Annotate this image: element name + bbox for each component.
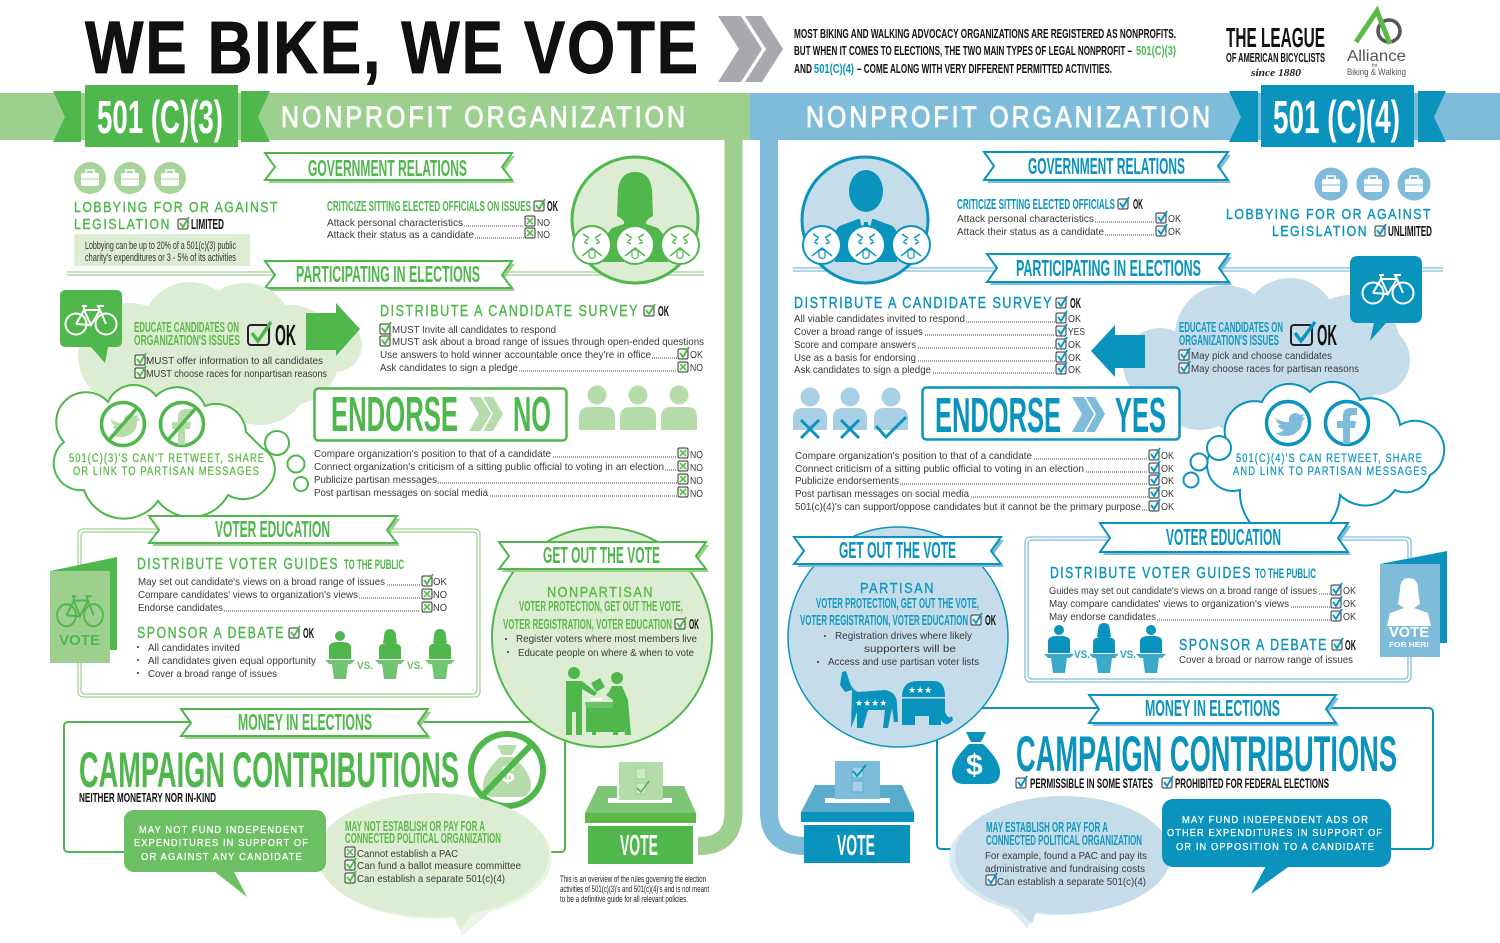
text: lobbying: LOBBYING FOR OR AGAINST xyxy=(1226,206,1432,223)
callout: may not fund: MAY NOT FUND INDEPENDENT xyxy=(139,824,305,836)
note: lobbying limit: charity's expenditures or 3 - 5% of its activities xyxy=(85,252,236,264)
endorse: yes: ENDORSE xyxy=(935,389,1061,443)
text: nonpartisan xyxy=(503,585,699,659)
text: distribute a candidate survey: OK xyxy=(1070,295,1081,312)
speech bubble: connected political organization: MAY ESTABLISH OR PAY FOR A xyxy=(986,820,1108,836)
text: educate candidates: EDUCATE CANDIDATES ON xyxy=(134,320,239,336)
text: distribute voter guides: OK xyxy=(1343,598,1356,610)
illustration: man and angry faces xyxy=(802,157,930,283)
illustration: woman and angry faces xyxy=(572,157,699,283)
text: criticize officials: NO xyxy=(537,229,550,241)
endorse: no: NO xyxy=(513,388,551,442)
text: criticize officials: Attack personal characteristics xyxy=(957,213,1094,225)
icon: debate podiums: VS. xyxy=(1074,649,1090,661)
disclaimer text: to be a definitive guide for all relevant policies. xyxy=(560,894,688,905)
thought cloud: cannot retweet: 501(C)(3)'S CAN'T RETWEET, SHARE xyxy=(69,453,265,465)
text: distribute a candidate survey: MUST Invite all candidates to respond xyxy=(392,324,556,336)
logo: Alliance for Biking and Walking: Biking & Walking xyxy=(1347,67,1406,77)
banner: money in elections xyxy=(1089,695,1339,726)
panel: government relations right xyxy=(957,152,1432,240)
icon: ballot box left: VOTE xyxy=(620,830,658,862)
panel: money in elections left xyxy=(64,709,565,936)
icon: grey chevrons xyxy=(718,16,783,82)
icon: elephant: ★★★ xyxy=(908,685,932,695)
text: nonpartisan: Register voters where most members live xyxy=(516,633,697,645)
text: educate candidates xyxy=(1179,320,1359,375)
callout: may not fund: OR AGAINST ANY CANDIDATE xyxy=(141,851,303,863)
text: distribute a candidate survey: NO xyxy=(690,362,703,374)
text: sponsor a debate: SPONSOR A DEBATE xyxy=(1179,637,1328,654)
heading: nonprofit organization left: NONPROFIT ORGANIZATION xyxy=(281,101,688,134)
disclaimer text: This is an overview of the rules governing the election xyxy=(560,874,706,885)
icons: briefcases xyxy=(74,162,186,194)
text: distribute a candidate survey: Ask candidates to sign a pledge xyxy=(380,362,518,374)
text: distribute a candidate survey: Use answers to hold winner accountable once they're in office xyxy=(380,349,651,361)
text: educate candidates: May choose races for partisan reasons xyxy=(1191,363,1359,375)
thought cloud: cannot retweet: OR LINK TO PARTISAN MESSAGES xyxy=(73,466,260,478)
list: endorse no rules: Publicize partisan messages xyxy=(314,474,437,486)
icon: elephant xyxy=(902,681,953,725)
text: distribute voter guides: OK xyxy=(1343,585,1356,597)
callout: may not fund: EXPENDITURES IN SUPPORT OF xyxy=(134,837,309,849)
icon: vote for her folder xyxy=(1380,551,1447,657)
text: lobbying xyxy=(1226,206,1432,240)
icons: people with crosses and check xyxy=(793,388,908,438)
list: endorse no rules: Post partisan messages on social media xyxy=(314,487,488,499)
icon: bicycle speech bubble xyxy=(60,290,122,363)
text: educate candidates xyxy=(134,320,327,380)
text: sponsor a debate xyxy=(1179,637,1356,666)
text: distribute a candidate survey: OK xyxy=(658,303,669,320)
text: distribute a candidate survey: MUST ask about a broad range of issues through open-ended questions xyxy=(392,336,704,348)
text: criticize officials: CRITICIZE SITTING ELECTED OFFICIALS xyxy=(957,196,1115,213)
speech bubble: connected political organization: For example, found a PAC and pay its xyxy=(985,850,1147,862)
text: educate candidates: ORGANIZATION'S ISSUES xyxy=(134,333,240,349)
text: criticize officials xyxy=(327,198,558,241)
text: distribute voter guides: TO THE PUBLIC xyxy=(344,556,404,572)
text: distribute a candidate survey: DISTRIBUTE A CANDIDATE SURVEY xyxy=(380,303,639,320)
list: endorse yes rules: Connect criticism of a sitting public official to voting in an election xyxy=(795,463,1084,475)
speech bubble: connected political organization: administrative and fundraising costs xyxy=(985,863,1145,875)
banner: government relations: GOVERNMENT RELATIONS xyxy=(308,155,467,181)
thought cloud: cannot retweet xyxy=(54,385,308,519)
text: distribute a candidate survey: Use as a basis for endorsing xyxy=(794,352,916,364)
intro text: 501(C)(3) xyxy=(1136,43,1176,58)
text: distribute voter guides: TO THE PUBLIC xyxy=(1255,565,1316,581)
text: partisan: VOTER REGISTRATION, VOTER EDUCATION xyxy=(800,612,968,629)
text: sponsor a debate: All candidates given equal opportunity xyxy=(148,655,317,667)
note: lobbying limit xyxy=(74,234,250,266)
callout: may fund: OR IN OPPOSITION TO A CANDIDATE xyxy=(1176,841,1375,853)
text: lobbying: UNLIMITED xyxy=(1388,223,1432,240)
ribbon: 501(c)(4) xyxy=(1229,85,1446,147)
panel: money in elections right xyxy=(937,695,1433,929)
text: criticize officials: OK xyxy=(1168,226,1181,238)
speech bubble: connected political organization: CONNECTED POLITICAL ORGANIZATION xyxy=(345,831,501,847)
callout: may fund: MAY FUND INDEPENDENT ADS OR xyxy=(1182,814,1369,826)
list: endorse yes rules: OK xyxy=(1161,450,1174,462)
text: distribute a candidate survey: Cover a broad range of issues xyxy=(794,326,923,338)
banner: get out the vote: GET OUT THE VOTE xyxy=(543,542,660,568)
text: criticize officials: OK xyxy=(1168,213,1181,225)
text: lobbying: LOBBYING FOR OR AGAINST xyxy=(74,199,279,216)
list: endorse no rules: NO xyxy=(690,462,703,474)
list: endorse yes rules: OK xyxy=(1161,501,1174,513)
left header bar and connector xyxy=(0,93,750,846)
text: nonpartisan: VOTER REGISTRATION, VOTER EDUCATION xyxy=(503,616,672,633)
banner: money in elections: MONEY IN ELECTIONS xyxy=(1145,695,1280,721)
speech bubble: connected political organization: Can establish a separate 501(c)(4) xyxy=(357,873,505,885)
ribbon: 501(c)(3): 501 (C)(3) xyxy=(97,91,223,143)
text: distribute voter guides: Guides may set out candidate's views on a broad range of issues xyxy=(1049,585,1317,597)
subheading: neither monetary nor in-kind: NEITHER MONETARY NOR IN-KIND xyxy=(79,790,216,805)
text: criticize officials: Attack their status as a candidate xyxy=(957,226,1104,238)
title: WE BIKE, WE VOTE xyxy=(85,6,700,89)
thought cloud: can retweet xyxy=(1184,382,1444,543)
text: partisan: supporters will be xyxy=(864,643,956,655)
panel: get out the vote left: OK xyxy=(689,616,699,633)
text: distribute a candidate survey: OK xyxy=(1068,364,1081,376)
text: distribute voter guides: DISTRIBUTE VOTER GUIDES xyxy=(1050,565,1252,582)
text: distribute a candidate survey: OK xyxy=(1068,352,1081,364)
list: endorse no rules: NO xyxy=(690,488,703,500)
intro text xyxy=(794,26,1176,76)
cloud: educate candidates xyxy=(78,282,362,430)
banner: participating in elections xyxy=(265,261,515,291)
icon: vote for her folder: FOR HER! xyxy=(1389,640,1429,649)
icons: three people xyxy=(579,386,697,430)
text: educate candidates: OK xyxy=(1317,320,1337,352)
text: OK xyxy=(547,198,558,215)
list: endorse yes rules: Compare organization's position to that of a candidate xyxy=(795,450,1032,462)
banner: voter education xyxy=(1100,523,1351,555)
list: endorse yes rules: OK xyxy=(1161,488,1174,500)
banner: voter education: VOTER EDUCATION xyxy=(1166,524,1281,550)
intro text: BUT WHEN IT COMES TO ELECTIONS, THE TWO MAIN TYPES OF LEGAL NONPROFIT – xyxy=(794,43,1132,58)
text: distribute a candidate survey: OK xyxy=(1068,339,1081,351)
disclaimer text xyxy=(560,874,709,905)
icon: crossed-out money bag xyxy=(471,734,543,806)
text: distribute a candidate survey xyxy=(794,295,1085,376)
text: sponsor a debate: Cover a broad range of issues xyxy=(148,668,277,680)
panel: get out the vote right: OK xyxy=(985,612,996,629)
text: nonpartisan: VOTER PROTECTION, GET OUT THE VOTE, xyxy=(519,598,683,615)
text: distribute voter guides: May compare candidates' views to organization's views xyxy=(1049,598,1289,610)
text: nonpartisan: NONPARTISAN xyxy=(547,585,654,601)
panel: voter education left xyxy=(50,516,480,697)
list: endorse no rules: NO xyxy=(690,475,703,487)
icon: donkey xyxy=(840,671,898,728)
text: sponsor a debate: OK xyxy=(303,625,314,642)
list: endorse yes rules: OK xyxy=(1161,475,1174,487)
text: distribute voter guides xyxy=(137,556,447,614)
panel: government relations left xyxy=(74,153,558,266)
banner: government relations xyxy=(265,153,515,183)
speech bubble: connected political organization xyxy=(949,796,1171,929)
panel: get out the vote left xyxy=(492,527,712,747)
intro text: – COME ALONG WITH VERY DIFFERENT PERMITTED ACTIVITIES. xyxy=(857,61,1112,76)
cloud: educate candidates xyxy=(1123,278,1410,435)
text: educate candidates: OK xyxy=(275,320,296,352)
banner: voter education xyxy=(149,516,400,546)
text: sponsor a debate: SPONSOR A DEBATE xyxy=(137,625,285,642)
speech bubble: connected political organization: Can establish a separate 501(c)(4) xyxy=(997,876,1146,888)
text: educate candidates: May pick and choose candidates xyxy=(1191,350,1332,362)
banner: government relations xyxy=(984,152,1231,183)
speech bubble: connected political organization xyxy=(317,793,552,936)
logo: League of American Bicyclists: OF AMERICAN BICYCLISTS xyxy=(1226,50,1325,65)
icon: voter guide folder: VOTE xyxy=(59,632,100,649)
icon: ballot box left xyxy=(585,762,696,864)
text: criticize officials: Attack personal characteristics xyxy=(327,217,463,229)
text: sponsor a debate xyxy=(137,625,317,680)
thought cloud: can retweet: 501(C)(4)'S CAN RETWEET, SHARE xyxy=(1236,453,1423,465)
speech bubble: connected political organization: MAY NOT ESTABLISH OR PAY FOR A xyxy=(345,819,485,835)
text: distribute voter guides: OK xyxy=(433,576,447,588)
intro text: 501(C)(4) xyxy=(814,61,854,76)
text: educate candidates: EDUCATE CANDIDATES ON xyxy=(1179,320,1283,336)
icon: ballot box right: VOTE xyxy=(837,830,875,862)
list: endorse no rules: NO xyxy=(690,449,703,461)
banner: money in elections xyxy=(181,709,431,739)
panel: voter education right xyxy=(1025,523,1447,682)
panel: participating in elections left xyxy=(54,157,704,519)
text: distribute voter guides xyxy=(1049,565,1356,623)
ribbon: 501(c)(3) xyxy=(53,85,270,147)
icon: crossed-out money bag: $ xyxy=(501,761,515,788)
banner: money in elections: MONEY IN ELECTIONS xyxy=(238,709,372,735)
icon: debate podiums xyxy=(1044,623,1166,673)
logo: League of American Bicyclists: since 1880 xyxy=(1250,68,1301,79)
text: criticize officials: CRITICIZE SITTING ELECTED OFFICIALS ON ISSUES xyxy=(327,198,531,215)
list: endorse no rules: Compare organization's position to that of a candidate xyxy=(314,448,551,460)
right header bar and connector xyxy=(750,93,1500,846)
intro text: MOST BIKING AND WALKING ADVOCACY ORGANIZATIONS ARE REGISTERED AS NONPROFITS. xyxy=(794,26,1176,41)
text: nonpartisan: Educate people on where & when to vote xyxy=(518,647,694,659)
list: endorse yes rules: Post partisan messages on social media xyxy=(795,488,969,500)
text: educate candidates: MUST choose races for nonpartisan reasons xyxy=(146,368,327,380)
ribbon: 501(c)(4): 501 (C)(4) xyxy=(1273,91,1400,143)
list: endorse no rules: Connect organization's criticism of a sitting public official to voting in an election xyxy=(314,461,664,473)
text: lobbying: LIMITED xyxy=(191,216,224,233)
text: distribute a candidate survey: All viable candidates invited to respond xyxy=(794,313,965,325)
logo: Alliance for Biking and Walking xyxy=(1347,11,1406,77)
list: endorse yes rules: OK xyxy=(1161,463,1174,475)
text: distribute voter guides: DISTRIBUTE VOTER GUIDES xyxy=(137,556,339,573)
text: distribute a candidate survey xyxy=(380,303,704,374)
text: distribute voter guides: NO xyxy=(433,602,447,614)
icon: money bag: $ xyxy=(966,749,983,782)
text: criticize officials: Attack their status as a candidate xyxy=(327,229,474,241)
icon: voters at ballot box xyxy=(566,667,631,735)
icon: money bag xyxy=(952,732,1000,784)
text: criticize officials: NO xyxy=(537,217,550,229)
logo: League of American Bicyclists xyxy=(1226,22,1325,79)
subheading: state and federal rules: PROHIBITED FOR FEDERAL ELECTIONS xyxy=(1175,775,1329,791)
list: endorse yes rules: 501(c)(4)'s can support/oppose candidates but it cannot be the primary purpose xyxy=(795,501,1141,513)
speech bubble: connected political organization: CONNECTED POLITICAL ORGANIZATION xyxy=(986,833,1142,849)
logo: League of American Bicyclists: THE LEAGUE xyxy=(1226,22,1325,53)
banner: get out the vote xyxy=(794,537,1004,567)
endorse: yes: YES xyxy=(1115,389,1166,443)
icon: ballot box right xyxy=(801,761,914,863)
icon: bicycle speech bubble xyxy=(1350,256,1422,341)
banner: participating in elections: PARTICIPATING IN ELECTIONS xyxy=(296,261,480,287)
banner: participating in elections: PARTICIPATING IN ELECTIONS xyxy=(1016,255,1201,281)
list: endorse no rules xyxy=(314,448,703,500)
intro text: AND xyxy=(794,61,812,76)
text: distribute voter guides: Endorse candidates xyxy=(138,602,223,614)
text: lobbying: LEGISLATION xyxy=(74,216,171,233)
text: distribute a candidate survey: YES xyxy=(1068,326,1085,338)
panel: get out the vote right xyxy=(788,527,1008,747)
icon: debate podiums xyxy=(325,629,455,679)
text: distribute voter guides: OK xyxy=(1343,611,1356,623)
text: distribute a candidate survey: OK xyxy=(1068,313,1081,325)
note: lobbying limit: Lobbying can be up to 20% of a 501(c)(3) public xyxy=(85,240,236,252)
text: partisan: Access and use partisan voter lists xyxy=(828,656,979,668)
panel: voter education right: OK xyxy=(1345,637,1356,654)
banner: get out the vote: GET OUT THE VOTE xyxy=(839,537,956,563)
text: educate candidates: MUST offer information to all candidates xyxy=(146,355,323,367)
icon: debate podiums: VS. xyxy=(357,660,373,672)
text: distribute voter guides: May set out candidate's views on a broad range of issues xyxy=(138,576,385,588)
text: distribute a candidate survey: DISTRIBUTE A CANDIDATE SURVEY xyxy=(794,295,1053,312)
subheading: state and federal rules: PERMISSIBLE IN SOME STATES xyxy=(1030,775,1153,791)
text: sponsor a debate: All candidates invited xyxy=(148,642,240,654)
heading: nonprofit organization right: NONPROFIT ORGANIZATION xyxy=(806,101,1213,134)
callout: may fund: OTHER EXPENDITURES IN SUPPORT OF xyxy=(1167,827,1383,839)
text: partisan: Registration drives where likely xyxy=(835,630,973,642)
logo: Alliance for Biking and Walking: Alliance xyxy=(1347,48,1406,65)
speech bubble: connected political organization: Can fund a ballot measure committee xyxy=(357,860,521,872)
text: educate candidates: ORGANIZATION'S ISSUES xyxy=(1179,333,1279,349)
icon: vote for her folder: VOTE xyxy=(1389,625,1429,641)
arrow: right xyxy=(306,303,360,356)
thought cloud: can retweet: AND LINK TO PARTISAN MESSAGES xyxy=(1233,466,1428,478)
callout: may fund xyxy=(1162,799,1391,894)
banner: get out the vote xyxy=(499,542,709,572)
text: distribute a candidate survey: Ask candidates to sign a pledge xyxy=(794,364,931,376)
text: lobbying xyxy=(74,199,279,233)
text: partisan: PARTISAN xyxy=(860,581,935,597)
icons: briefcases xyxy=(1314,168,1430,200)
subheading: state and federal rules xyxy=(1016,775,1329,791)
logo: Alliance for Biking and Walking: for xyxy=(1372,63,1378,69)
arrow: left xyxy=(1091,325,1145,377)
text: criticize officials xyxy=(957,196,1181,238)
text: distribute voter guides: Compare candidates' views to organization's views xyxy=(138,589,358,601)
banner: voter education: VOTER EDUCATION xyxy=(215,516,330,542)
speech bubble: connected political organization: Cannot establish a PAC xyxy=(357,848,458,860)
icon: debate podiums: VS. xyxy=(1120,649,1136,661)
banner: participating in elections xyxy=(987,254,1232,285)
icon: donkey: ★★★★ xyxy=(855,698,887,708)
text: distribute voter guides: May endorse candidates xyxy=(1049,611,1156,623)
list: endorse yes rules: Publicize endorsements xyxy=(795,475,899,487)
icon: debate podiums: VS. xyxy=(407,660,423,672)
text: partisan xyxy=(800,581,996,668)
banner: government relations: GOVERNMENT RELATIONS xyxy=(1028,153,1185,179)
panel: participating in elections right xyxy=(793,157,1444,543)
icon: voter guide folder xyxy=(50,557,117,663)
text: distribute voter guides: NO xyxy=(433,589,447,601)
text: partisan: VOTER PROTECTION, GET OUT THE VOTE, xyxy=(816,595,979,612)
heading: campaign contributions: CAMPAIGN CONTRIBUTIONS xyxy=(79,742,459,798)
callout: may not fund xyxy=(124,810,326,897)
endorse: no: ENDORSE xyxy=(331,388,458,442)
text: lobbying: LEGISLATION xyxy=(1272,223,1368,240)
disclaimer text: activities of 501(c)(3)'s and 501(c)(4)'s and is not meant xyxy=(560,884,709,895)
list: endorse yes rules xyxy=(795,448,1174,513)
text: distribute a candidate survey: OK xyxy=(690,349,703,361)
text: distribute a candidate survey: Score and compare answers xyxy=(794,339,916,351)
text: sponsor a debate: Cover a broad or narrow range of issues xyxy=(1179,654,1353,666)
text: criticize officials: OK xyxy=(1133,196,1143,213)
